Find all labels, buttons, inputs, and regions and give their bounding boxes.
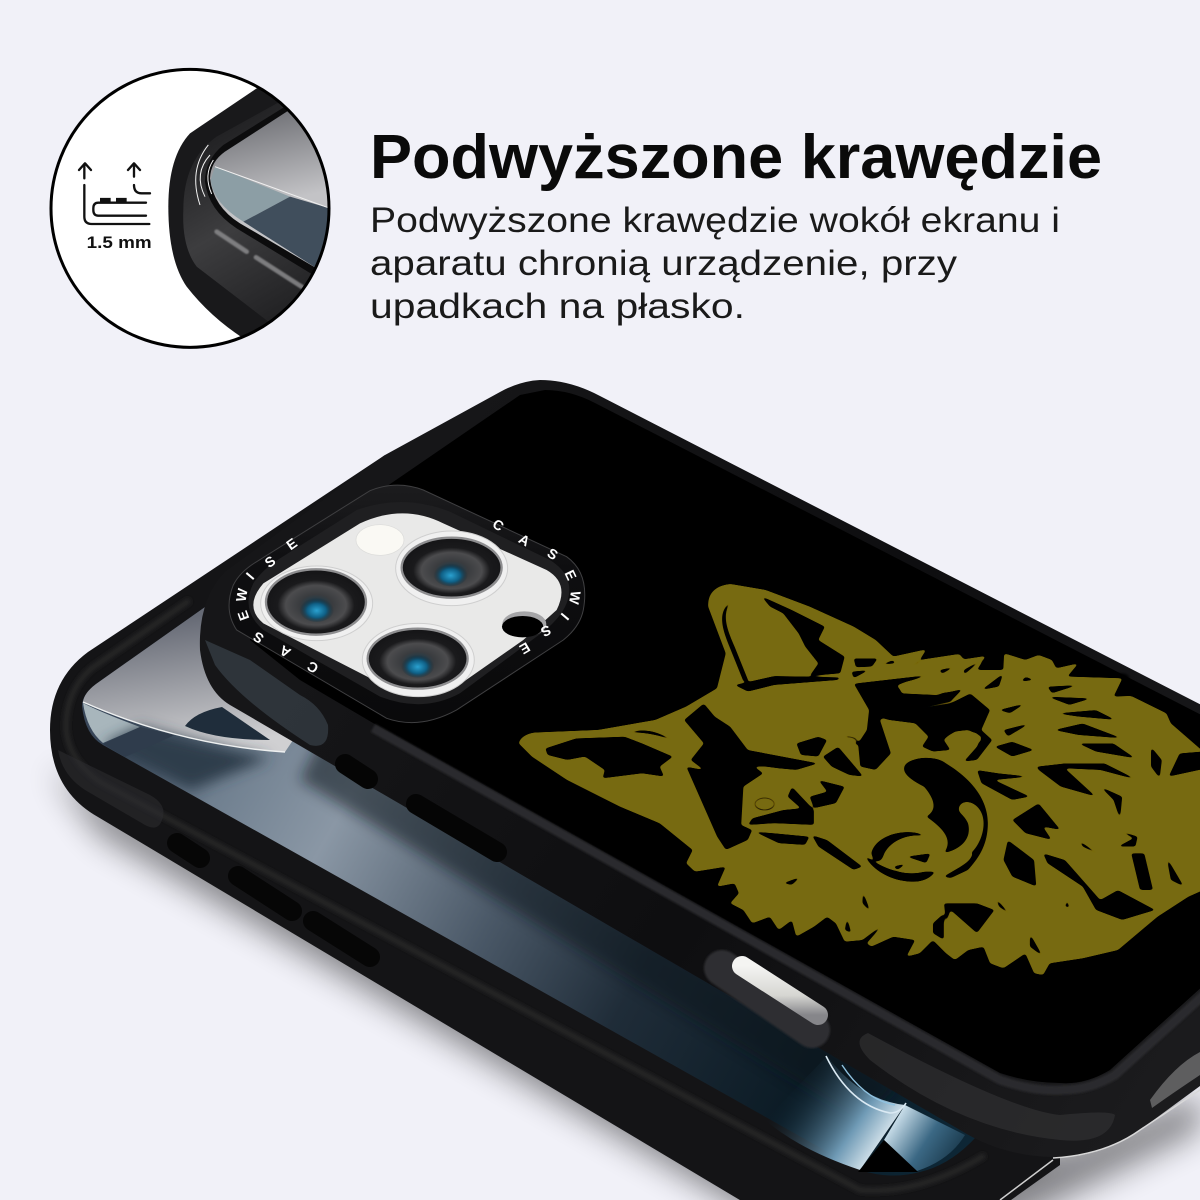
camera ring bbox=[229, 485, 585, 723]
flash bbox=[356, 525, 404, 555]
circle outline bbox=[51, 69, 329, 347]
body text bbox=[370, 201, 1060, 326]
corner outer bbox=[168, 88, 288, 336]
ring lettering: C bbox=[304, 658, 321, 677]
drop shadows under phone bbox=[52, 770, 1200, 1200]
reflected sky bbox=[210, 111, 333, 268]
lens left bbox=[261, 566, 373, 641]
edge highlights bbox=[217, 232, 302, 287]
wolf nose bbox=[871, 832, 926, 861]
ring inner bevel bbox=[248, 502, 569, 704]
silver button bbox=[742, 966, 818, 1015]
wolf backing bbox=[519, 584, 1200, 975]
wolf fur tuft bbox=[898, 679, 973, 694]
ring lettering: S bbox=[262, 552, 278, 571]
bottom silver rim bbox=[1053, 1080, 1200, 1158]
phone with open screen bbox=[50, 455, 1060, 1200]
button: volume down bbox=[313, 921, 370, 957]
wolf right ear bbox=[722, 600, 749, 682]
panel edge gloss bbox=[373, 728, 1200, 1090]
phone screen bbox=[82, 590, 985, 1176]
wolf forehead marks bbox=[854, 683, 891, 770]
corner translucent band bbox=[183, 103, 311, 321]
impact arcs bbox=[196, 145, 213, 205]
ring lettering: S bbox=[538, 622, 554, 640]
lens bottom bbox=[362, 623, 474, 697]
heading: Podwyższone krawędzie bbox=[370, 123, 1102, 192]
ring lettering: W bbox=[566, 590, 584, 606]
ring lettering bbox=[233, 515, 584, 677]
ring lettering: C bbox=[490, 515, 507, 534]
sensor hole bbox=[502, 611, 546, 637]
ring lettering: E bbox=[517, 639, 533, 658]
side button small bbox=[345, 764, 368, 779]
dark inner lip bbox=[205, 108, 314, 274]
ring lettering: W bbox=[233, 586, 251, 603]
speaker detail bbox=[1150, 1052, 1200, 1108]
wolf eye rings bbox=[755, 737, 857, 810]
body line 1: Podwyższone krawędzie wokół ekranu i bbox=[370, 201, 1060, 240]
camera module bbox=[229, 485, 585, 723]
dark wallpaper bbox=[243, 197, 333, 268]
measurement label: 1.5 mm bbox=[87, 233, 152, 252]
wallpaper glow bbox=[765, 1056, 965, 1172]
wolf artwork bbox=[519, 584, 1200, 975]
corner pad bbox=[58, 750, 164, 828]
ring lettering: I bbox=[243, 569, 257, 583]
body line 2: aparatu chronią urządzenie, przy bbox=[370, 244, 958, 283]
ring lettering: S bbox=[544, 545, 561, 563]
lens top right bbox=[396, 531, 508, 606]
button: action bbox=[177, 843, 200, 858]
icon: raised lip diagram bbox=[79, 163, 150, 224]
side pad bottom bbox=[859, 1033, 1115, 1141]
wolf tongue highlight bbox=[944, 802, 984, 860]
reflection line bbox=[215, 167, 330, 208]
ring lettering: E bbox=[283, 535, 300, 553]
ring lettering: E bbox=[234, 609, 252, 623]
lens plate bbox=[253, 513, 561, 695]
black back panel bbox=[250, 390, 1200, 1083]
wolf cheek stripe bbox=[684, 703, 818, 850]
lower edge silver detail bbox=[1000, 1160, 1053, 1200]
button: volume up bbox=[238, 876, 292, 911]
circle background bbox=[51, 69, 329, 347]
pale reflection bbox=[211, 167, 290, 222]
phone frame bbox=[50, 455, 1060, 1200]
frame inner highlight bbox=[66, 600, 985, 1191]
wolf eyes bbox=[748, 787, 814, 825]
wolf muzzle bbox=[904, 758, 988, 878]
case corner close-up bbox=[168, 88, 340, 338]
silver button recess bbox=[722, 968, 812, 1030]
side button long bbox=[416, 804, 497, 852]
wolf fur strands bbox=[1054, 710, 1136, 758]
wolf silhouette bbox=[519, 584, 1200, 975]
wolf left ear bbox=[545, 737, 673, 778]
body line 3: upadkach na płasko. bbox=[370, 287, 745, 326]
ring lettering: I bbox=[558, 610, 572, 623]
side pad left bbox=[205, 640, 328, 746]
wolf forehead tuft bbox=[944, 731, 981, 753]
ring lettering: S bbox=[250, 628, 266, 647]
ring lettering: A bbox=[516, 530, 533, 549]
detail circle: raised edge close-up bbox=[51, 69, 340, 347]
ring lettering: E bbox=[561, 567, 580, 583]
ring lettering: A bbox=[277, 642, 293, 661]
case outer frame bbox=[200, 380, 1200, 1157]
phone case back bbox=[200, 380, 1200, 1158]
